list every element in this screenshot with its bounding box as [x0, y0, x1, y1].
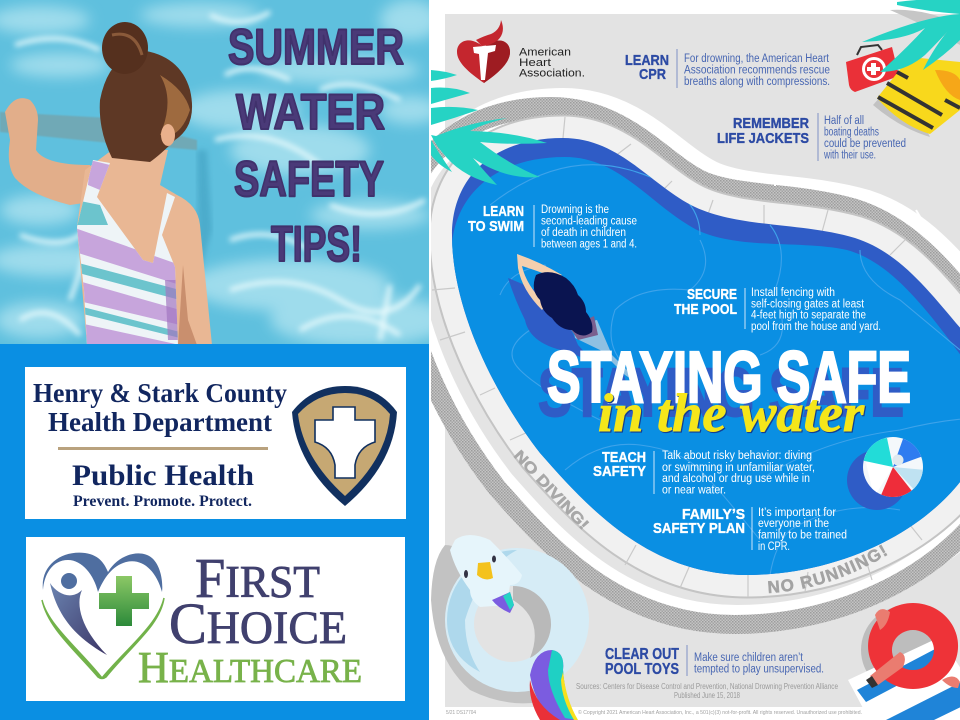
ring shadow: [861, 606, 949, 694]
tip: learn to swim: TO SWIM: [468, 218, 524, 235]
water caustic lines: [490, 165, 960, 575]
sources note: Sources: Centers for Disease Control and Prevention, National Drowning Prevention Alliance: [576, 682, 838, 691]
duck beak: [477, 562, 493, 579]
tip: family's safety plan: in CPR.: [758, 541, 790, 553]
hair bun: [102, 22, 148, 74]
rainbow tail: [530, 650, 577, 720]
pool water: [440, 138, 960, 600]
tip: clear out pool toys: tempted to play unsupervised.: [694, 664, 824, 676]
poster grey background: [445, 14, 960, 707]
sign: NO RUNNING!: NO RUNNING!: [768, 544, 888, 594]
tip: clear out pool toys: [605, 645, 824, 678]
department name: [33, 378, 287, 510]
tip: teach safety: [593, 449, 815, 496]
tip: teach safety: or swimming in unfamiliar water,: [662, 462, 815, 474]
wordmark: American: [519, 46, 571, 58]
department name: Henry & Stark County: [33, 378, 287, 408]
ball shadow: [847, 450, 907, 510]
tip: clear out pool toys: Make sure children aren’t: [694, 652, 804, 664]
department name: Prevent. Promote. Protect.: [73, 493, 252, 510]
wordmark: Heart: [519, 57, 551, 69]
icon: duck float: [431, 535, 589, 720]
heading: summer water safety tips: SAFETY: [234, 151, 384, 207]
duck head: [450, 535, 522, 607]
palm shadow: [890, 10, 960, 45]
AHA logo: [457, 20, 585, 83]
wordmark: HEALTHCARE: [138, 643, 362, 692]
panel: American Heart Association poster: [431, 0, 960, 720]
tip: remember life jackets: [717, 113, 906, 162]
tile gaps in checker band: [774, 184, 921, 216]
float shadow: [431, 545, 550, 703]
logo card: First Choice Healthcare: [26, 537, 405, 701]
palm fronds: [862, 0, 960, 72]
tip: remember life jackets: could be prevented: [824, 138, 906, 150]
tip: secure the pool: pool from the house and yard.: [751, 321, 881, 333]
tip: family's safety plan: family to be trained: [758, 530, 847, 542]
tip: learn to swim: second-leading cause: [541, 216, 637, 228]
tip: secure the pool: SECURE: [687, 286, 737, 303]
logo card: Henry and Stark County Health Department: [25, 367, 406, 519]
striped swimsuit: [77, 160, 178, 344]
icon: red swim ring on towel: [848, 603, 960, 720]
swimmer shadow: [508, 278, 587, 359]
department name: Public Health: [72, 459, 254, 492]
tan divider: [58, 447, 268, 450]
tip: remember life jackets: with their use.: [823, 150, 876, 162]
tip: teach safety: or near water.: [662, 484, 726, 496]
wordmark: Association.: [519, 68, 585, 80]
raised arm: [5, 98, 90, 205]
rainbow beak stripe: [492, 592, 514, 613]
wordmark: FIRST: [195, 548, 320, 610]
tip: family's safety plan: [653, 506, 847, 553]
arms: [517, 254, 562, 310]
heading: summer water safety tips: SUMMER: [228, 19, 404, 75]
title script shadow: in the water: [599, 384, 866, 444]
duck eyes: [464, 570, 468, 578]
footer code: 5/21 DS17704: [446, 710, 476, 716]
ring: [868, 603, 958, 689]
tile joints: [432, 117, 922, 597]
tip: learn CPR: LEARN: [625, 52, 669, 69]
tip: learn to swim: [468, 203, 637, 250]
department name: Health Department: [48, 407, 272, 437]
sign: NO DIVING!: NO DIVING!: [510, 447, 592, 533]
tip: secure the pool: Install fencing with: [751, 287, 835, 299]
tip: learn to swim: LEARN: [483, 203, 524, 220]
icon: palm leaves right: [862, 0, 960, 72]
tip: learn to swim: Drowning is the: [541, 204, 609, 216]
tip: remember life jackets: boating deaths: [824, 126, 879, 138]
icon: shield with cross: [292, 386, 397, 506]
tip: learn to swim: of death in children: [541, 227, 626, 239]
icon: life jacket: [873, 57, 960, 137]
tip: learn CPR: For drowning, the American Heart: [684, 53, 830, 65]
tip: learn CPR: Association recommends rescue: [684, 64, 830, 76]
tip: learn CPR: breaths along with compressions.: [684, 76, 830, 88]
tip: teach safety: TEACH: [602, 449, 646, 466]
title: staying safe in the water: [538, 350, 910, 434]
tip: teach safety: SAFETY: [593, 463, 646, 480]
pool surround: [432, 117, 960, 597]
title script: in the water: [598, 383, 865, 443]
striped towel: [848, 637, 960, 720]
hair: [534, 272, 592, 336]
heading: summer water safety tips: [228, 19, 404, 272]
heading: summer water safety tips: TIPS!: [271, 216, 362, 272]
tip: learn CPR: CPR: [639, 66, 666, 83]
tip: teach safety: Talk about risky behavior: diving: [662, 450, 812, 462]
swimmer illustration: [508, 254, 629, 378]
tip: clear out pool toys: POOL TOYS: [605, 661, 679, 678]
panel: photo of girl at pool: [0, 0, 450, 350]
tip: remember life jackets: Half of all: [824, 115, 864, 127]
jacket shadow: [873, 75, 930, 137]
legs: [574, 320, 629, 378]
footer copyright: © Copyright 2021 American Heart Association, Inc., a 501(c)(3) not-for-profit. All rights reserved. Unauthorized use prohibited.: [578, 709, 862, 716]
back and neck: [77, 150, 212, 345]
girl: [5, 22, 212, 350]
swimsuit: [570, 316, 598, 340]
tip: teach safety: and alcohol or drug use while in: [662, 473, 810, 485]
sources note: Published June 15, 2018: [674, 691, 740, 700]
sources note: [576, 682, 838, 700]
float ring: [445, 548, 589, 692]
tip: family's safety plan: It’s important for: [758, 507, 836, 519]
tip: secure the pool: [674, 286, 881, 333]
wordmark: CHOICE: [169, 591, 347, 656]
tip: clear out pool toys: CLEAR OUT: [605, 646, 679, 663]
tip: remember life jackets: REMEMBER: [733, 115, 809, 132]
tip: remember life jackets: LIFE JACKETS: [717, 130, 809, 147]
heading: summer water safety tips: WATER: [236, 84, 385, 140]
icon: palm leaves left: [431, 70, 547, 185]
tip: family's safety plan: SAFETY PLAN: [653, 520, 745, 537]
tip: secure the pool: THE POOL: [674, 301, 737, 318]
wordmark: [138, 548, 362, 692]
hand: [870, 652, 905, 685]
icon: heart with figure and cross: [42, 553, 164, 678]
icon: heart and torch: [457, 20, 510, 83]
pool handrail: [0, 112, 197, 150]
tip: family's safety plan: everyone in the: [758, 518, 829, 530]
wordmark: [519, 48, 584, 76]
ear: [161, 124, 175, 146]
tip: secure the pool: self-closing gates at least: [751, 298, 865, 310]
hair: [100, 50, 192, 162]
tip: family's safety plan: FAMILY’S: [682, 506, 745, 523]
tip: secure the pool: 4-feet high to separate the: [751, 310, 866, 322]
panel: blue logo background: [0, 344, 429, 720]
tip: learn to swim: between ages 1 and 4.: [541, 238, 637, 250]
icon: first aid kit: [846, 45, 899, 92]
tip: learn CPR: [625, 49, 830, 88]
right arm shadow: [178, 265, 197, 345]
photo: rippling water: [0, 0, 450, 346]
icon: beach ball: [847, 436, 926, 510]
